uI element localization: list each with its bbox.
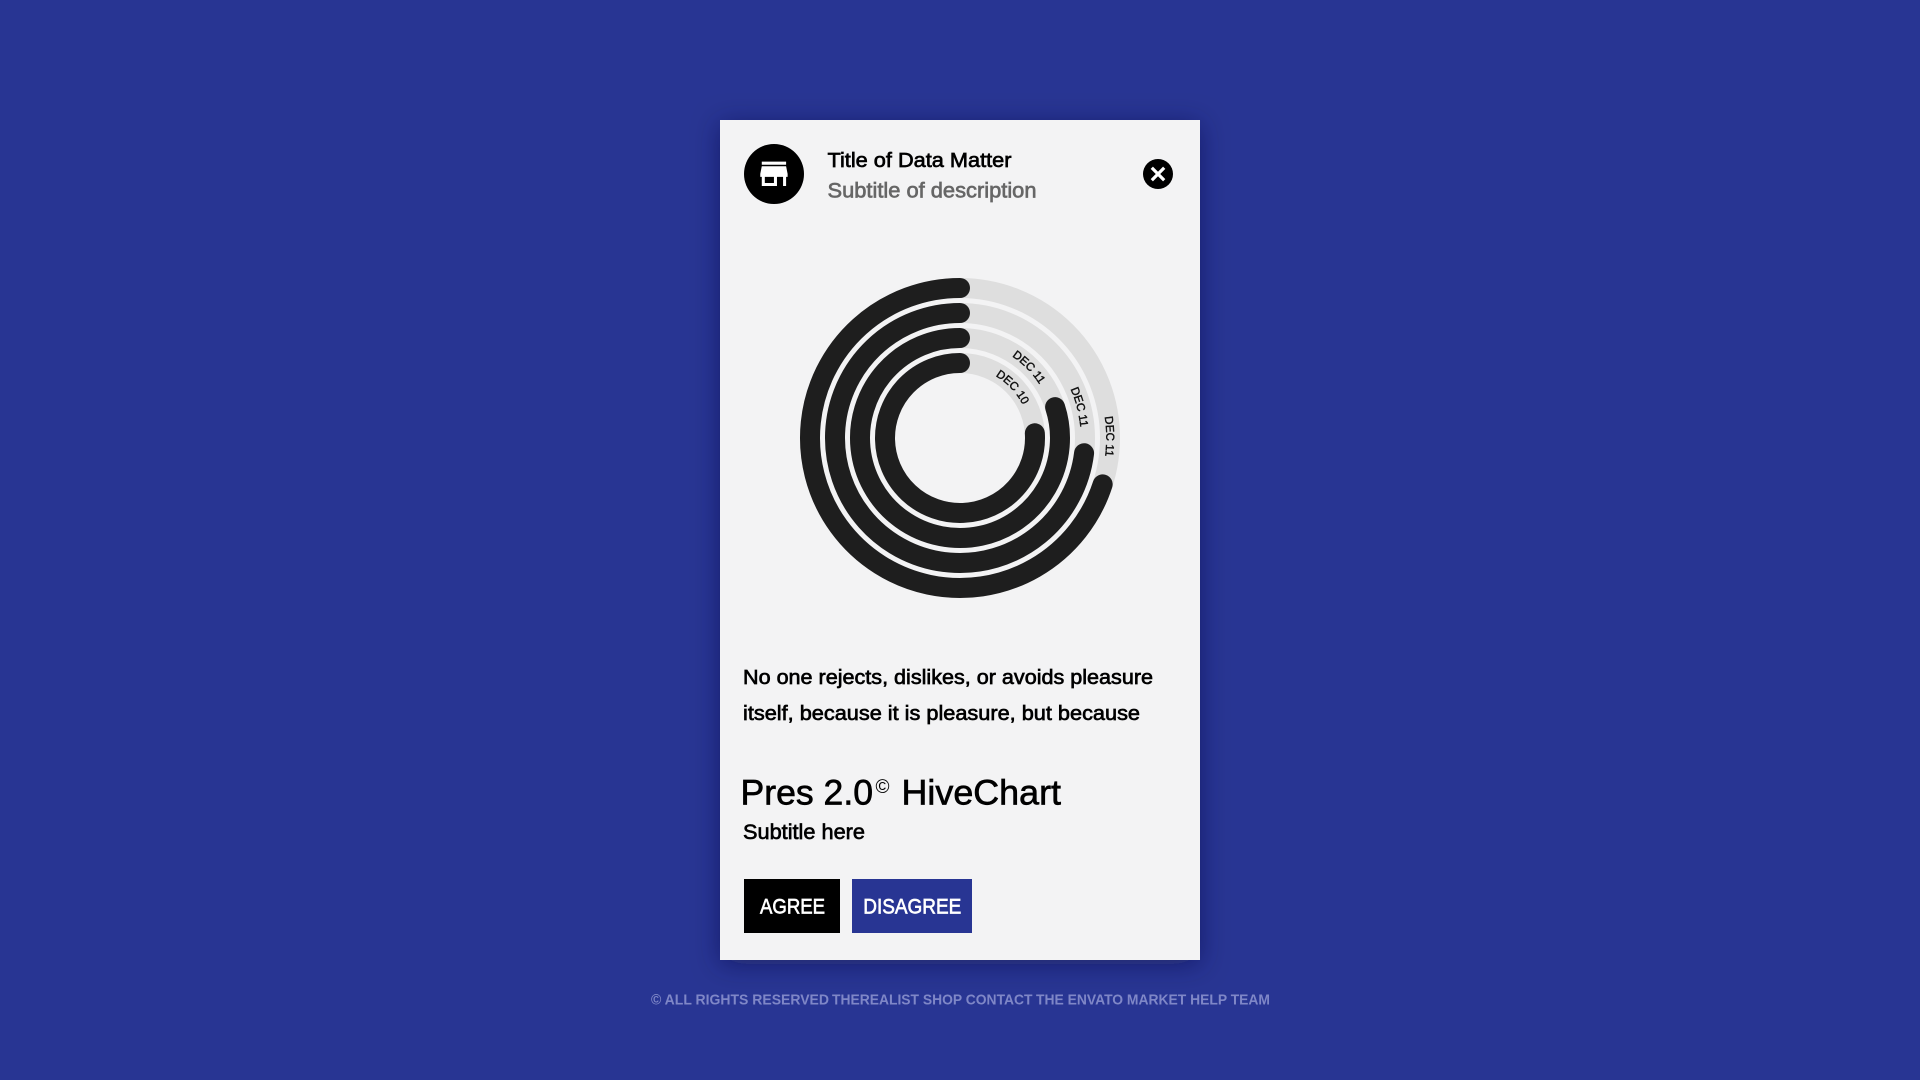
- date labels: DEC 11: [1012, 350, 1045, 384]
- icon: close: [1143, 159, 1173, 189]
- subheading: Subtitle here: [743, 821, 865, 844]
- date labels: DEC 10: [996, 370, 1029, 404]
- button: disagree: [852, 879, 972, 933]
- header subtitle: Subtitle of description: [828, 179, 1036, 202]
- header title: Title of Data Matter: [828, 150, 1012, 172]
- panel: card: [720, 120, 1200, 960]
- footer: THE ENVATO MARKET HELP TEAM: [1036, 992, 1270, 1008]
- footer: © ALL RIGHTS RESERVED: [651, 992, 829, 1008]
- date labels: DEC 11: [1104, 416, 1114, 456]
- date labels: [996, 350, 1114, 456]
- button: disagree: DISAGREE: [863, 895, 961, 918]
- button: agree: [744, 879, 840, 933]
- icon: store: [744, 144, 804, 204]
- heading: Pres 2.0: [740, 773, 873, 812]
- heading: ©: [876, 777, 890, 798]
- track rings: [810, 288, 1110, 588]
- heading: [740, 773, 1061, 812]
- radial bar chart: [800, 278, 1120, 598]
- paragraph: [743, 667, 1153, 725]
- date labels: DEC 11: [1070, 386, 1088, 427]
- footer: THEREALIST SHOP CONTACT: [832, 992, 1032, 1008]
- header: [744, 144, 1173, 204]
- paragraph: No one rejects, dislikes, or avoids pleasure: [743, 667, 1153, 689]
- footer: [651, 992, 1270, 1008]
- button: agree: AGREE: [760, 895, 825, 918]
- heading: HiveChart: [902, 773, 1061, 812]
- paragraph: itself, because it is pleasure, but because: [743, 703, 1140, 725]
- value arcs: [810, 288, 1103, 588]
